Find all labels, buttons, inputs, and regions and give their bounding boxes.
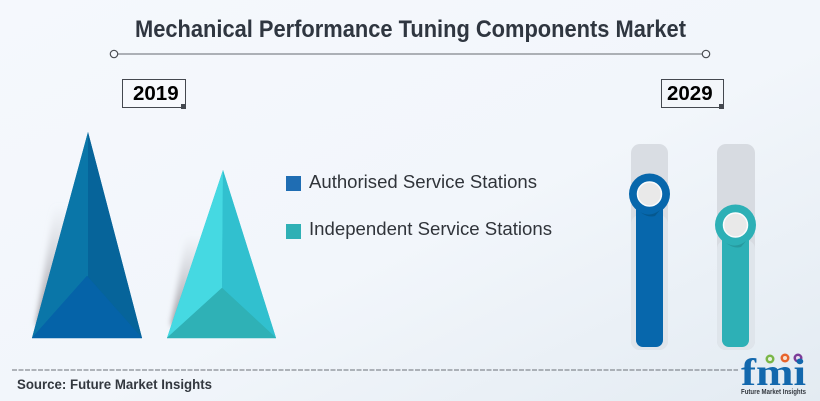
source text: Source: Future Market Insights [17,377,212,392]
year label 2029: 2029 [667,82,713,105]
year label 2019: 2019 [133,82,179,105]
legend item: authorised: Authorised Service Stations [309,171,537,192]
title rule [110,50,710,58]
pyramid chart: independent 2019 [167,170,276,338]
title: Mechanical Performance Tuning Components Market [135,16,686,43]
slider: independent 2029 [715,144,756,350]
logo tagline: Future Market Insights [741,387,806,396]
legend [286,171,552,239]
logo wordmark: fmi [741,352,806,394]
pyramid chart: authorised 2019 [32,132,142,338]
fmi logo [741,352,806,396]
logo dots [766,354,802,364]
footer rule [12,369,738,371]
year label 2029 [662,80,724,109]
legend item: independent: Independent Service Stations [309,218,552,239]
year label 2019 [122,80,186,109]
slider: authorised 2029 [629,144,670,350]
